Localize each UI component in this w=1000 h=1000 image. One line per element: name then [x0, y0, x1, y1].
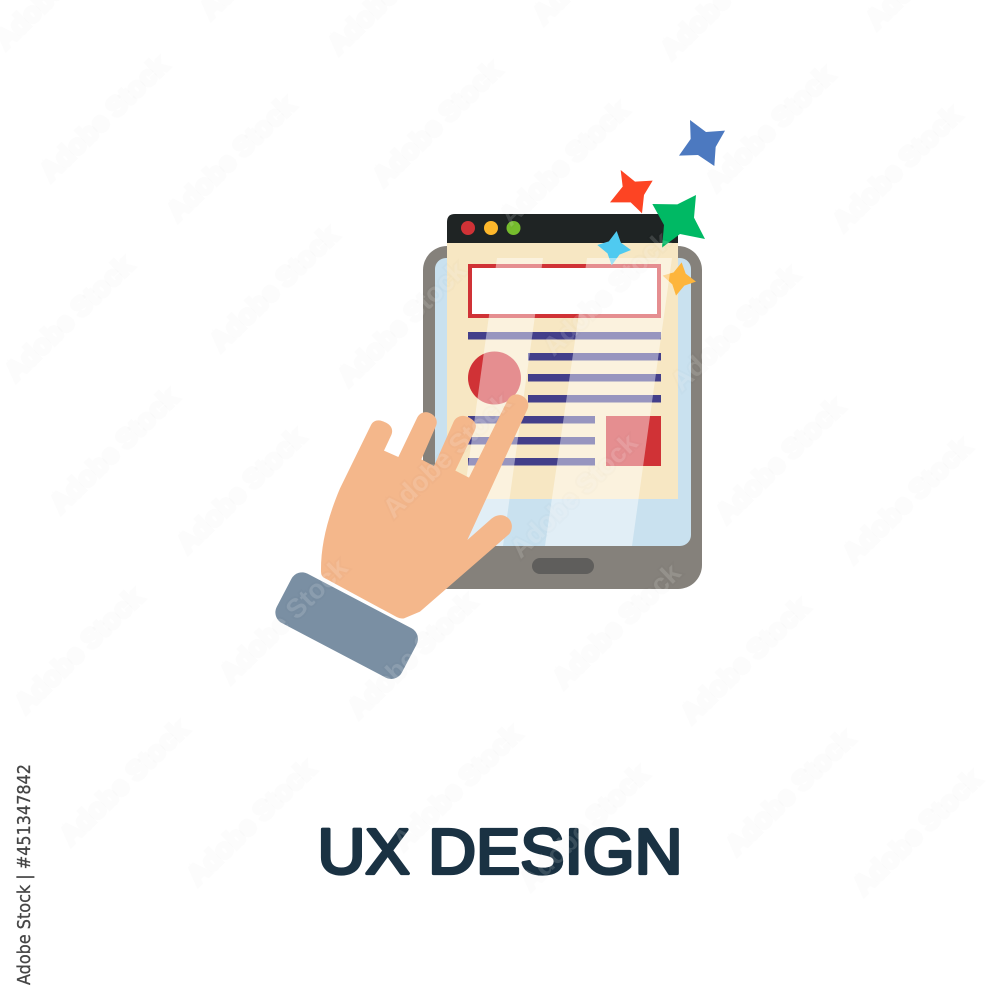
watermark pattern: Adobe Stock — [504, 427, 644, 564]
watermark pattern: Adobe Stock — [54, 714, 194, 851]
image circle — [468, 352, 521, 404]
watermark pattern: Adobe Stock — [720, 724, 860, 861]
watermark pattern: Adobe Stock — [514, 759, 654, 896]
hand and sleeve — [271, 394, 528, 683]
watermark pattern: Adobe Stock — [710, 392, 850, 529]
watermark pattern: Adobe Stock — [537, 225, 677, 362]
watermark pattern: Adobe Stock — [342, 587, 482, 724]
sleeve — [271, 568, 422, 683]
watermark pattern: Adobe Stock — [9, 582, 149, 719]
watermark pattern: Adobe Stock — [161, 90, 301, 227]
watermark pattern: Adobe Stock — [547, 557, 687, 694]
stars under the glare — [597, 231, 696, 296]
tablet body — [423, 246, 702, 589]
watermark pattern: Adobe Stock — [387, 719, 527, 856]
watermark pattern: Adobe Stock — [171, 422, 311, 559]
text lines — [468, 332, 661, 466]
stars above the window — [610, 120, 725, 248]
star: cyan — [597, 231, 631, 265]
watermark pattern: Adobe Stock — [34, 50, 174, 187]
watermark pattern: Adobe Stock — [214, 552, 354, 689]
image square — [606, 416, 661, 466]
illustration: tablet with web page, hand and stars — [271, 120, 725, 683]
watermark pattern: Adobe Stock — [494, 95, 634, 232]
title bar — [447, 214, 678, 243]
header box — [470, 266, 659, 316]
star: red — [610, 170, 653, 213]
watermark pattern: Adobe Stock — [204, 220, 344, 357]
watermark pattern: Adobe Stock — [847, 764, 987, 901]
watermark pattern: Adobe Stock — [700, 60, 840, 197]
watermark pattern: Adobe Stock — [675, 592, 815, 729]
window buttons — [461, 221, 520, 235]
watermark pattern: Adobe Stock — [181, 754, 321, 891]
watermark pattern: Adobe Stock — [377, 387, 517, 524]
watermark pattern: Adobe Stock — [367, 55, 507, 192]
watermark pattern: Adobe Stock — [44, 382, 184, 519]
title: UX DESIGN — [318, 816, 682, 888]
tablet home button — [532, 558, 594, 574]
star: yellow — [663, 262, 696, 296]
hand — [321, 394, 528, 618]
watermark pattern: Adobe Stock — [837, 432, 977, 569]
screen glare bands — [457, 258, 672, 546]
watermark pattern: Adobe Stock — [665, 260, 805, 397]
star: green — [652, 195, 705, 248]
watermark pattern: Adobe Stock — [332, 255, 472, 392]
watermark pattern: Adobe Stock — [827, 100, 967, 237]
tablet screen — [435, 258, 691, 546]
browser window — [447, 214, 678, 499]
watermark pattern: Adobe Stock — [0, 250, 139, 387]
page background — [447, 240, 678, 499]
stock id side text: Adobe Stock | #451347842 — [14, 764, 35, 985]
star: blue — [679, 120, 725, 166]
